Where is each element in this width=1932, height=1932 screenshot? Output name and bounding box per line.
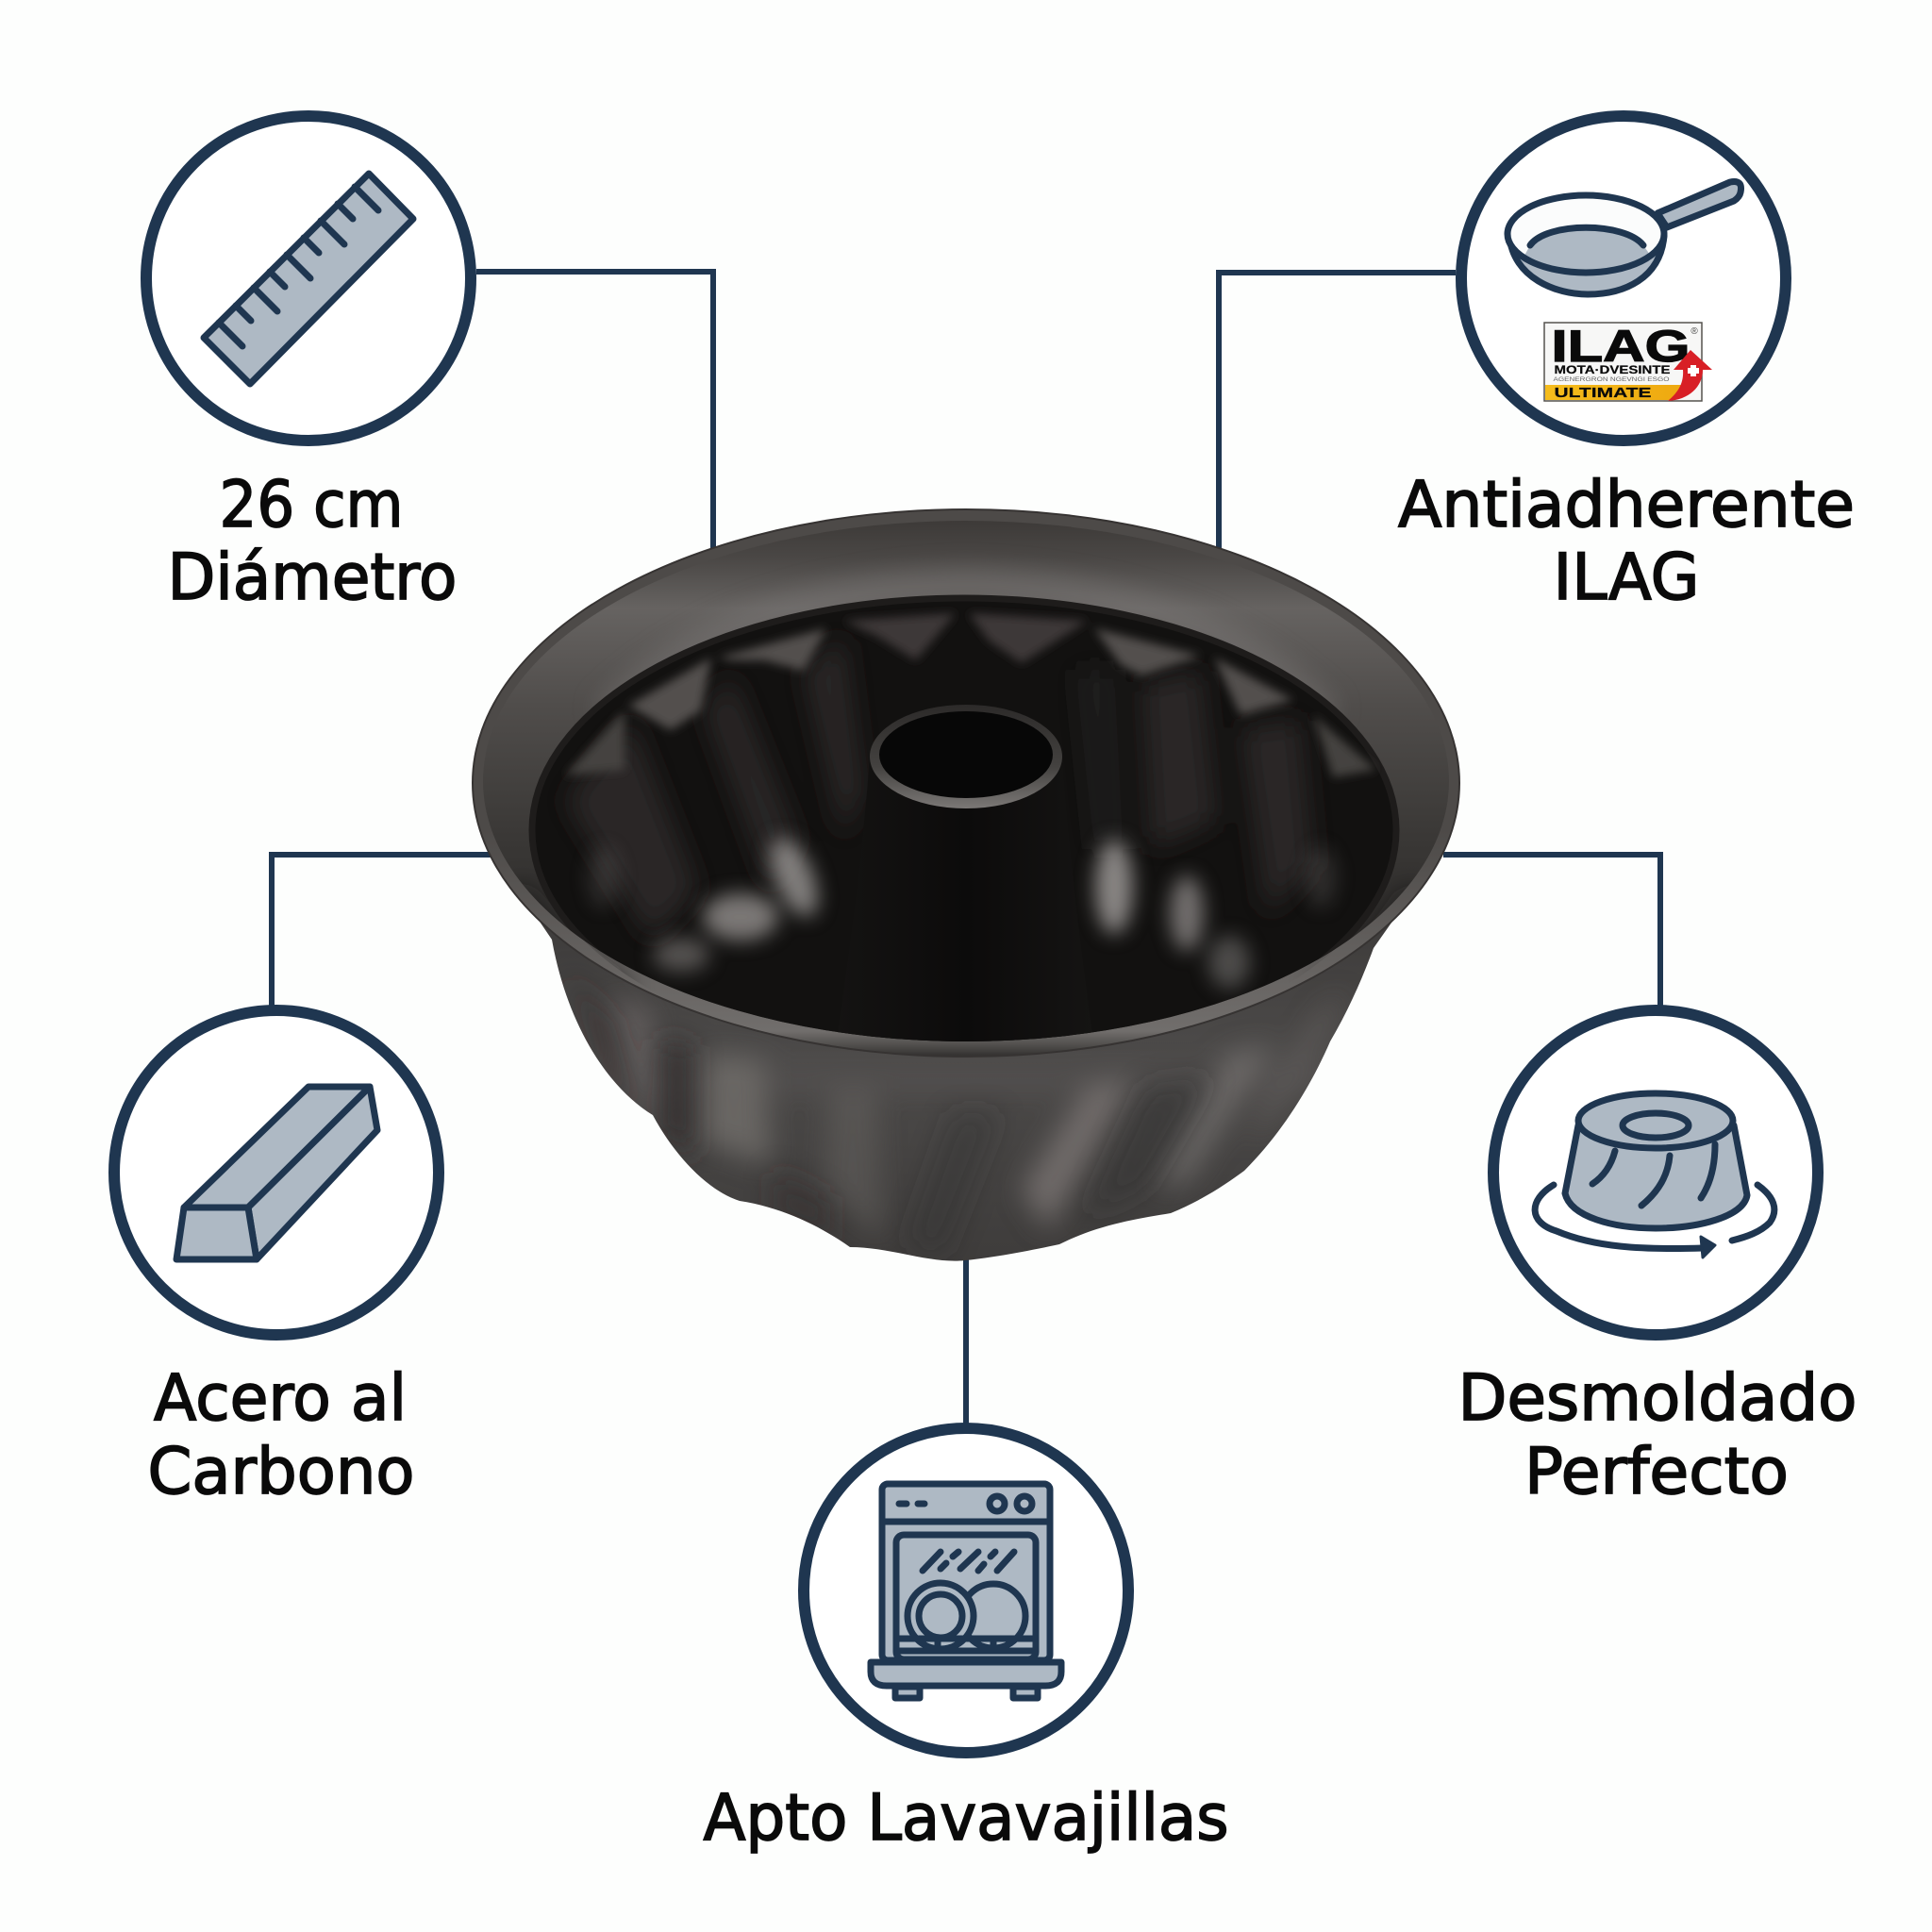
pan exterior body [540,922,1392,1261]
ILAG badge [1544,321,1712,401]
label [168,468,457,615]
feature: carbon steel [114,1010,439,1509]
icon: steel bar [176,1087,377,1259]
feature: easy release [1458,1010,1857,1509]
feature: diameter [146,116,471,615]
front lip [474,510,1458,1056]
ring [804,1428,1128,1753]
label: Desmoldado [1458,1361,1857,1436]
ILAG badge: ® [1690,326,1698,337]
tube rim [870,705,1062,808]
ring [1493,1010,1818,1335]
label: Apto Lavavajillas [704,1781,1228,1856]
product photo: fluted bundt cake pan [472,508,1462,1274]
ILAG badge: MOTA·DVESINTE [1555,363,1670,376]
feature: dishwasher safe [704,1428,1228,1856]
flute highlights [589,832,1336,989]
icon: frying pan [1507,181,1741,294]
ring [114,1010,439,1335]
label: Acero al [154,1361,407,1436]
icon: dishwasher [871,1484,1061,1698]
label: ILAG [1553,541,1700,615]
label: 26 cm [219,468,404,542]
label: Antiadherente [1398,468,1855,542]
central tube cone [838,779,1091,1041]
label: Carbono [147,1435,415,1509]
flute top facets [565,613,1376,777]
label: Perfecto [1524,1435,1789,1509]
tube hole [879,711,1053,798]
ring [146,116,471,441]
interior well [532,598,1396,1062]
label [1398,468,1855,615]
label [1458,1361,1857,1509]
label [147,1361,415,1509]
inner sloped band [483,521,1449,1041]
rim outer edge [472,508,1460,1058]
ring [1461,116,1786,441]
band sheen [509,583,1423,1000]
flute walls [565,635,1313,940]
connector lines [272,272,1660,1426]
icon: ruler [204,174,413,384]
ILAG badge: AGENERGRON NGEVNGI ESGO [1553,377,1670,383]
icon: unmolded cake with rotation arrow [1535,1093,1774,1257]
ILAG badge: ILAG [1551,321,1690,371]
ILAG badge: ULTIMATE [1555,385,1651,401]
feature: nonstick [1398,116,1855,615]
label: Diámetro [168,541,457,615]
